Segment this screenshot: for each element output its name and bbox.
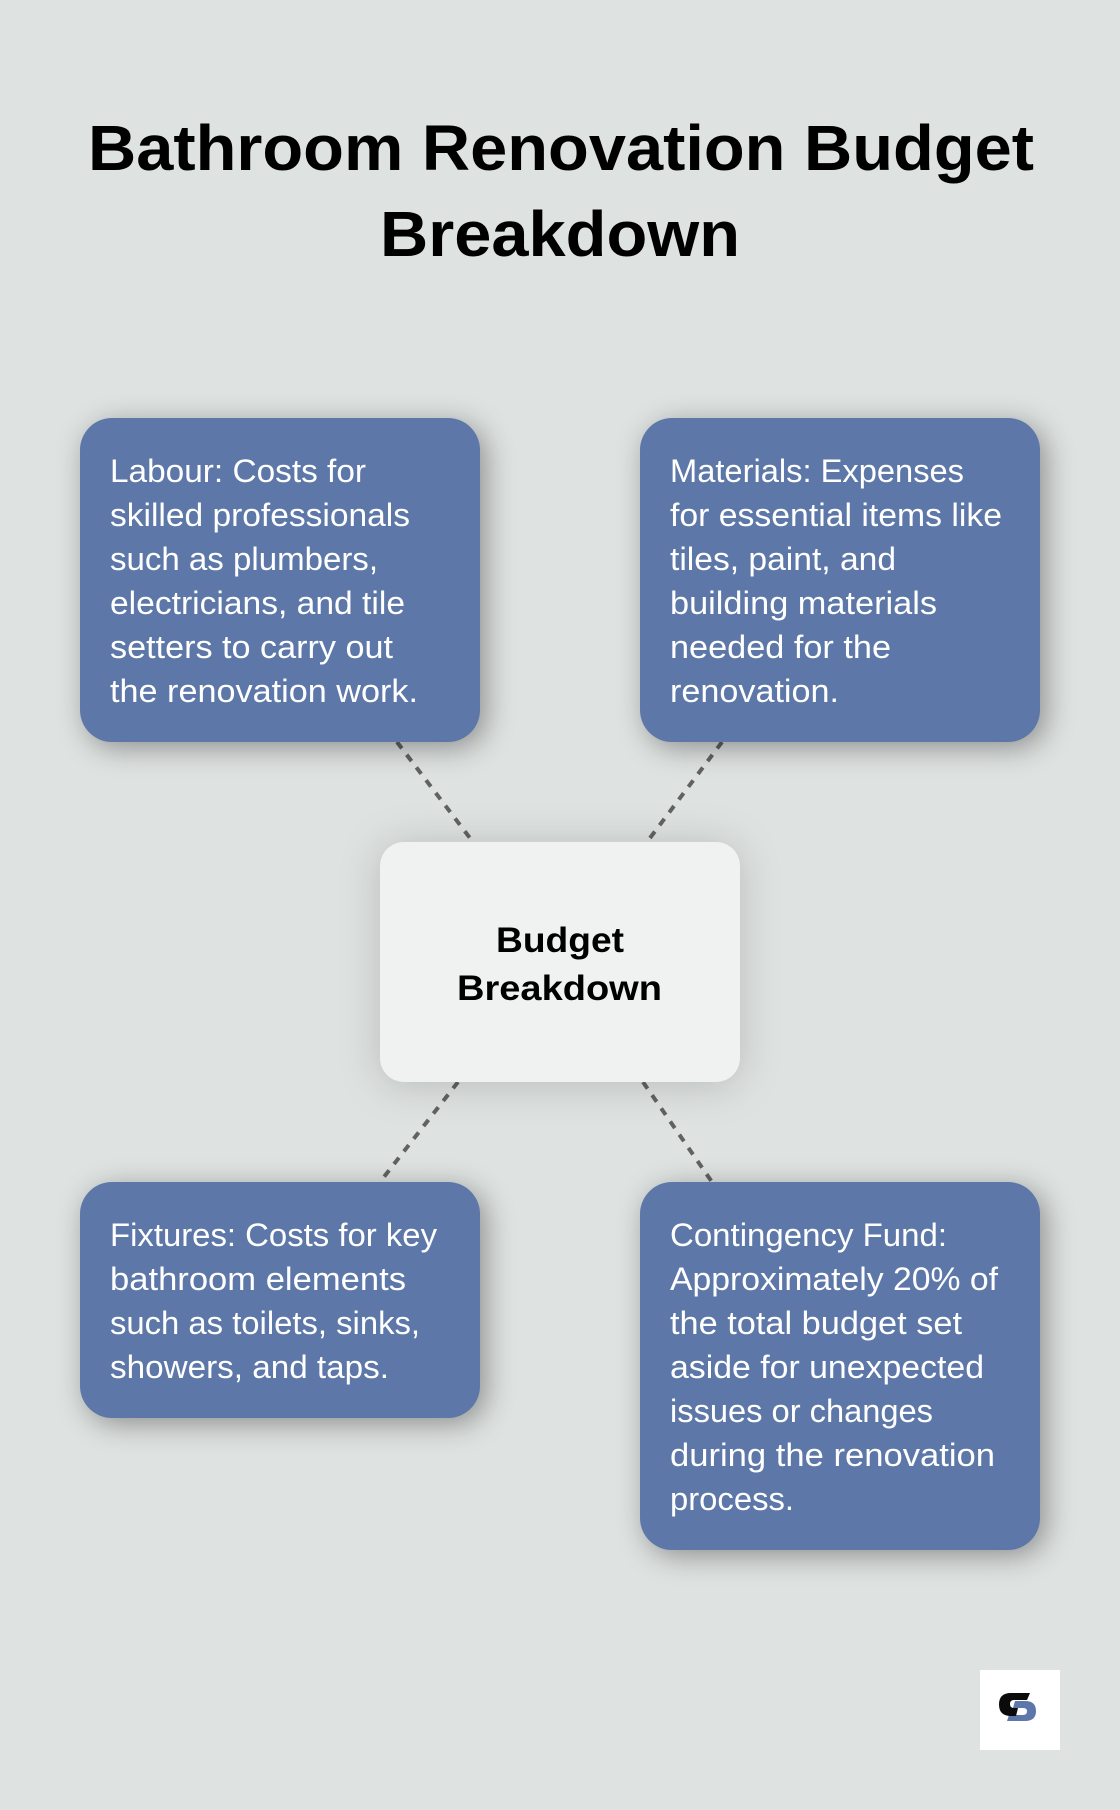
- connector: materials: [647, 742, 722, 842]
- materials text: Materials: Expenses: [670, 453, 964, 489]
- panel: labour: [80, 418, 480, 742]
- connector: contingency fund: [643, 1082, 712, 1182]
- title: [88, 112, 1034, 270]
- contingency text: during the renovation: [670, 1437, 995, 1473]
- connector: fixtures: [380, 1082, 458, 1182]
- fixtures text: Fixtures: Costs for key: [110, 1217, 437, 1253]
- panel: fixtures: [80, 1182, 480, 1418]
- fixtures text: showers, and taps.: [110, 1349, 389, 1385]
- materials text: needed for the: [670, 629, 891, 665]
- contingency text: the total budget set: [670, 1305, 962, 1341]
- contingency text: process.: [670, 1481, 794, 1517]
- fixtures text: such as toilets, sinks,: [110, 1305, 420, 1341]
- labour text: electricians, and tile: [110, 585, 405, 621]
- icon: logo: [980, 1670, 1060, 1750]
- fixtures text: [110, 1217, 437, 1385]
- contingency text: Approximately 20% of: [670, 1261, 998, 1297]
- panel: materials: [640, 418, 1040, 742]
- labour text: Labour: Costs for: [110, 453, 366, 489]
- centre label: [457, 921, 662, 1008]
- connector lines: [380, 742, 722, 1182]
- centre label: Breakdown: [457, 969, 662, 1008]
- materials text: building materials: [670, 585, 937, 621]
- labour text: [110, 453, 418, 709]
- materials text: [670, 453, 1002, 709]
- contingency text: [670, 1217, 998, 1517]
- materials text: renovation.: [670, 673, 839, 709]
- centre label: Budget: [496, 921, 624, 960]
- labour text: skilled professionals: [110, 497, 410, 533]
- title: Bathroom Renovation Budget: [88, 112, 1034, 184]
- title: Breakdown: [380, 198, 740, 270]
- materials text: for essential items like: [670, 497, 1002, 533]
- materials text: tiles, paint, and: [670, 541, 896, 577]
- contingency text: Contingency Fund:: [670, 1217, 947, 1253]
- contingency text: issues or changes: [670, 1393, 933, 1429]
- labour text: setters to carry out: [110, 629, 393, 665]
- panel: contingency fund: [640, 1182, 1040, 1550]
- fixtures text: bathroom elements: [110, 1261, 406, 1297]
- contingency text: aside for unexpected: [670, 1349, 984, 1385]
- labour text: such as plumbers,: [110, 541, 378, 577]
- labour text: the renovation work.: [110, 673, 418, 709]
- panel: budget breakdown centre: [380, 842, 740, 1082]
- connector: labour: [397, 742, 473, 842]
